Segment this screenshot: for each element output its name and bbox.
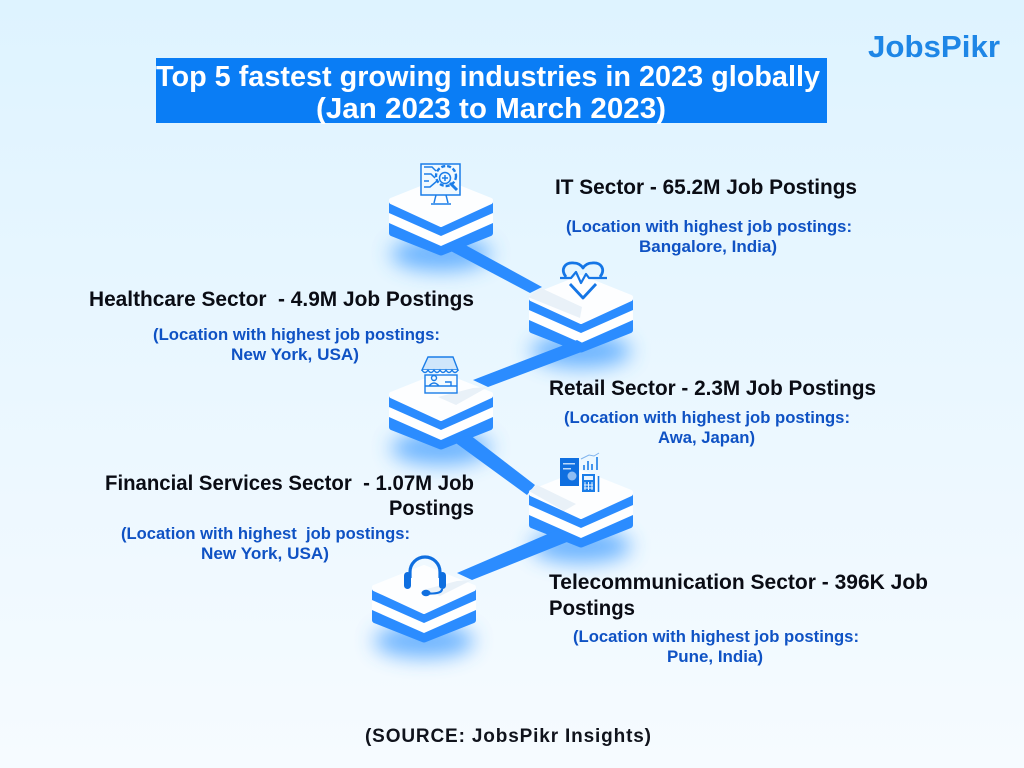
connector: Financial to Telecom [457, 530, 572, 580]
title banner: (Jan 2023 to March 2023) [316, 93, 666, 125]
shadow patch on Retail block [438, 387, 488, 405]
text: Financial services sector: New York, USA) [201, 545, 329, 563]
text: Telecommunication sector: Postings [549, 597, 635, 620]
text: Retail sector: (Location with highest job postings: [564, 409, 850, 427]
text: Healthcare sector: (Location with highest job postings: [153, 326, 440, 344]
text: IT sector: (Location with highest job postings: [566, 218, 852, 236]
title banner: Top 5 fastest growing industries in 2023 globally [156, 61, 820, 93]
source note: (SOURCE: JobsPikr Insights) [365, 726, 651, 747]
title banner [156, 58, 827, 125]
connector: Retail to Financial [453, 435, 535, 495]
text: Telecommunication sector: (Location with highest job postings: [573, 628, 859, 646]
text: Financial services sector: Financial Services Sector - 1.07M Job [105, 472, 474, 495]
text: Financial services sector: Postings [389, 497, 474, 520]
icon: heart with pulse [560, 263, 607, 298]
block: Telecom [372, 567, 476, 642]
text: Healthcare sector [89, 288, 474, 364]
logo: JobsPikr: JobsPikr [868, 29, 1000, 64]
icon: finance report and calculator [560, 453, 599, 492]
text: Telecommunication sector: Telecommunication Sector - 396K Job [549, 571, 928, 594]
text: Retail sector: Retail Sector - 2.3M Job Postings [549, 377, 876, 400]
block: Financial [529, 472, 633, 548]
icon: monitor with gear and magnifier [421, 164, 460, 204]
text: IT sector: IT Sector - 65.2M Job Postings [555, 176, 857, 199]
icon: headset [404, 557, 446, 596]
block: Retail [389, 374, 493, 450]
text: Financial services sector: (Location with highest job postings: [121, 525, 410, 543]
text: Telecommunication sector: Pune, India) [667, 648, 763, 666]
text: Healthcare sector: Healthcare Sector - 4.9M Job Postings [89, 288, 474, 311]
text: Financial services sector [105, 472, 474, 563]
block: IT [389, 180, 493, 256]
text: Retail sector [549, 377, 876, 447]
text: Telecommunication sector [549, 571, 928, 666]
text: IT sector [555, 176, 857, 256]
block: Healthcare [528, 277, 633, 352]
connector: IT to Healthcare [445, 241, 542, 293]
text: Retail sector: Awa, Japan) [658, 429, 755, 447]
icon: market stall [422, 357, 458, 393]
connector: Healthcare to Retail [473, 340, 592, 387]
text: Healthcare sector: New York, USA) [231, 346, 359, 364]
block shadows [374, 237, 631, 658]
text: IT sector: Bangalore, India) [639, 238, 777, 256]
